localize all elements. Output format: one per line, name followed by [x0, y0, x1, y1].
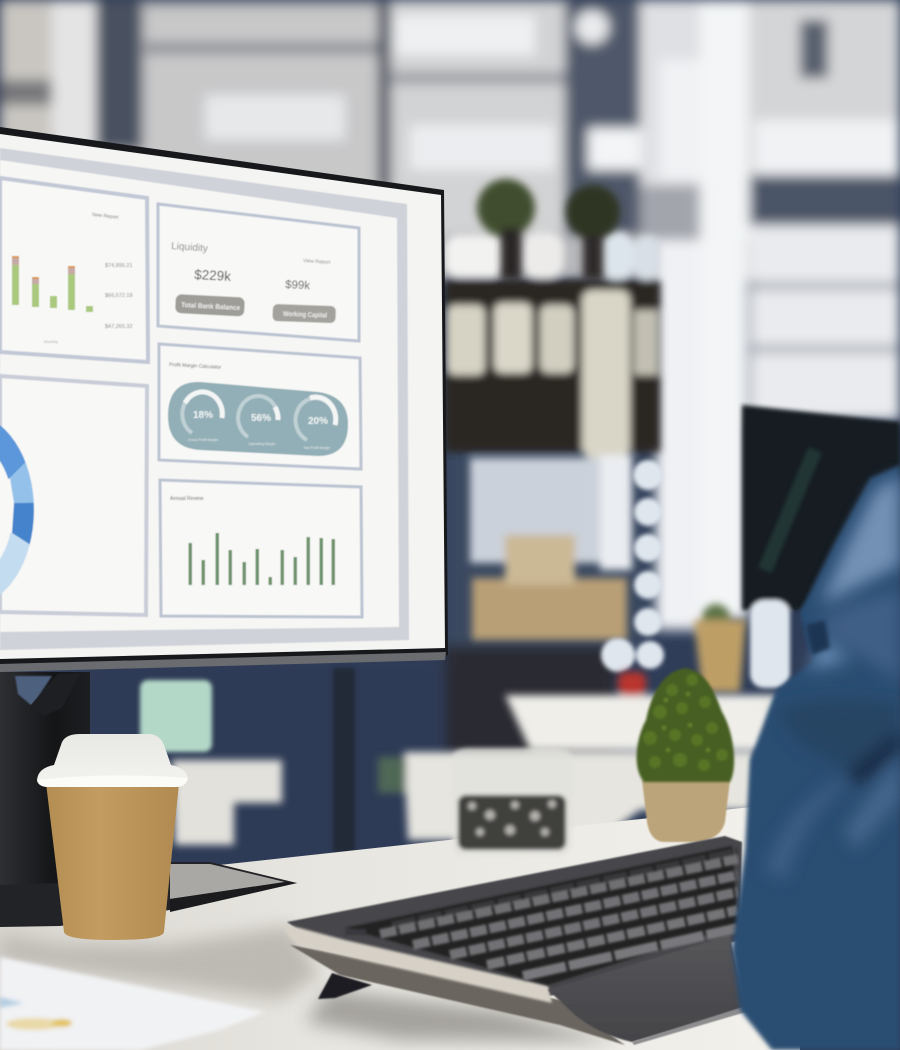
- panel: bar chart report: New Report: [92, 212, 119, 221]
- monitor: [0, 127, 448, 927]
- wrist rest silver edge: [632, 1006, 746, 1045]
- desk shadows: [0, 925, 620, 1042]
- sleeve dark pocket fold: [806, 620, 830, 655]
- glass jar with metal clips: [452, 748, 574, 856]
- background: potted plants on shelf: [477, 179, 746, 692]
- key well: [345, 846, 738, 985]
- paper document on desk: [0, 957, 265, 1050]
- background: white desks: [172, 672, 780, 845]
- panel: profit margin calculator: Gross Profit Margin: [188, 438, 218, 442]
- panel: bar chart report: $66,572.18: [105, 293, 133, 299]
- panel: liquidity: Working Capital: [283, 311, 327, 320]
- key rows: [345, 851, 738, 976]
- keyboard base: [287, 836, 742, 996]
- keyboard silver front edge: [285, 925, 552, 1003]
- panel: profit margin calculator: [159, 344, 361, 469]
- shirt folds: [765, 475, 900, 880]
- panel: profit margin calculator: 18%: [193, 410, 213, 421]
- paper coffee cup: [37, 734, 188, 940]
- stand base: [0, 862, 297, 927]
- panel: liquidity: Total Bank Balance: [181, 302, 240, 312]
- monitor bezel: [0, 127, 448, 668]
- plant foliage: [637, 668, 734, 782]
- monitor lower chin highlight: [0, 652, 446, 672]
- donut ring: [0, 424, 35, 595]
- gauges: [182, 392, 336, 440]
- plant pot: [642, 780, 730, 842]
- panel: annual review bars: Annual Review: [170, 496, 204, 502]
- panel: annual review bars: [160, 480, 362, 617]
- panel: liquidity: [158, 204, 359, 341]
- wrist rest: [548, 935, 746, 1042]
- panel: donut chart: [0, 376, 147, 620]
- panel: bar chart report: [0, 178, 148, 362]
- keyboard underside: [290, 945, 625, 1045]
- panel: bar chart report: $74,895.21: [105, 263, 133, 269]
- cup lid: [37, 734, 188, 786]
- monitor screen: [0, 134, 445, 659]
- stand hinge gap: [15, 676, 52, 706]
- keyboard foot: [318, 973, 372, 999]
- green bars: [12, 264, 93, 312]
- panel: liquidity: Liquidity: [171, 241, 208, 255]
- panel: liquidity: View Report: [303, 258, 331, 266]
- monitor stand: [0, 672, 297, 927]
- sleeve body: [732, 465, 900, 1050]
- panel: bar chart report: Monthly: [44, 339, 58, 344]
- panel: bar chart report: $47,265.32: [105, 324, 133, 330]
- panel: profit margin calculator: 20%: [308, 416, 328, 427]
- panel: liquidity: $99k: [285, 279, 311, 292]
- person's arm in blue denim shirt: [732, 465, 900, 1050]
- keyboard: [285, 836, 746, 1045]
- background: shelf with objects: [445, 232, 660, 640]
- desk surface: [0, 806, 760, 1050]
- panel: profit margin calculator: 56%: [251, 413, 271, 424]
- panel: liquidity: $229k: [194, 267, 232, 284]
- panel: profit margin calculator: Profit Margin Calculator: [169, 362, 222, 371]
- background: dark navy wall: [90, 450, 645, 875]
- background: building windows: [0, 0, 900, 630]
- cup body: [46, 783, 179, 940]
- dashboard inner frame: [0, 148, 409, 650]
- background: glass dots and dark screen: [140, 405, 900, 853]
- panel: profit margin calculator: Net Profit Margin: [304, 446, 330, 450]
- panel: profit margin calculator: Operating Margin: [248, 442, 276, 446]
- small topiary plant: [637, 668, 734, 842]
